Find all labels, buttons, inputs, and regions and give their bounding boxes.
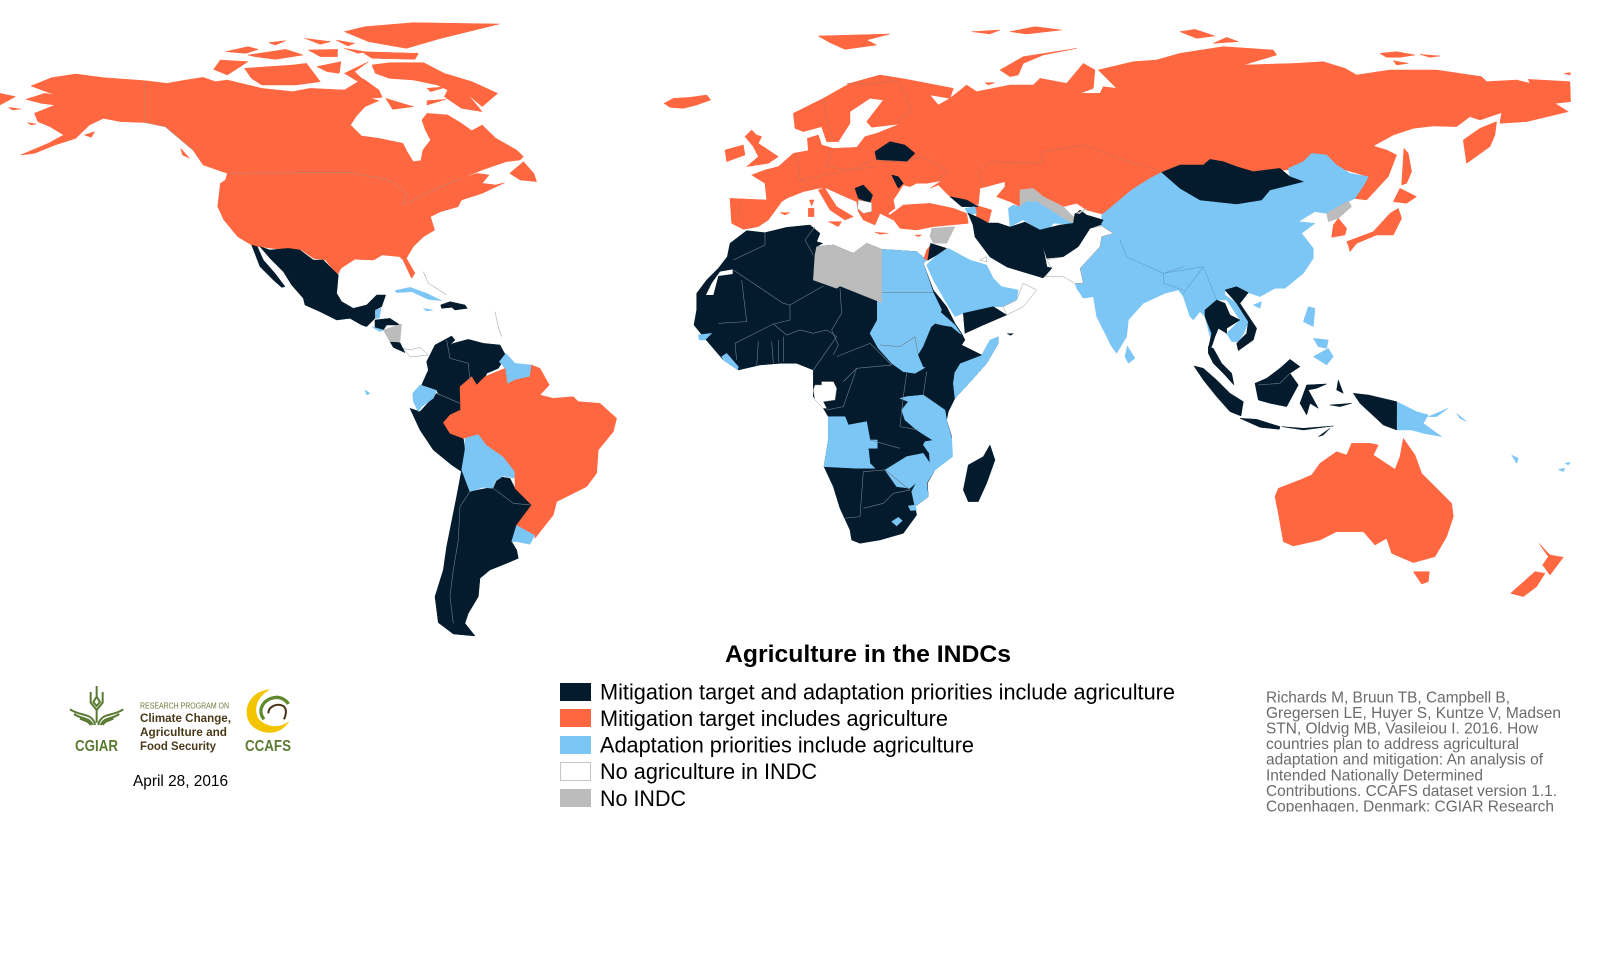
citation text block: adaptation and mitigation: An analysis of	[1266, 752, 1544, 769]
logo text: research program: Food Security	[140, 741, 217, 753]
legend item: adaptation: Adaptation priorities include agriculture	[600, 732, 974, 758]
region: Iran	[968, 213, 1052, 278]
citation text block: Contributions. CCAFS dataset version 1.1.	[1266, 783, 1557, 800]
region: North America	[0, 23, 537, 278]
citation text block: STN, Oldvig MB, Vasileiou I. 2016. How	[1266, 720, 1538, 738]
logo text: research program: Climate Change,	[140, 713, 231, 725]
region: Australia and New Zealand	[1275, 438, 1571, 597]
date: April 28, 2016	[133, 773, 228, 790]
icon: CCAFS crescent	[247, 689, 289, 733]
region: Africa and Arabia	[694, 225, 1037, 543]
logo text: research program: RESEARCH PROGRAM ON	[140, 702, 229, 710]
world map	[0, 23, 1571, 636]
legend	[560, 680, 1175, 811]
logo: CGIAR	[70, 686, 123, 755]
logo text: research program: Agriculture and	[140, 727, 227, 739]
citation text block: Intended Nationally Determined	[1266, 767, 1483, 784]
legend item: no INDC: No INDC	[600, 786, 686, 811]
citation text block	[1266, 689, 1561, 816]
logo text: research program	[140, 702, 231, 753]
icon: wheat and leaves	[70, 686, 123, 725]
legend item: no agriculture: No agriculture in INDC	[600, 759, 817, 784]
legend item: mitigation and adaptation: Mitigation target and adaptation priorities include agriculture	[600, 680, 1175, 704]
legend item: no INDC	[560, 786, 686, 811]
region: Latin America	[252, 245, 617, 636]
citation text block: Richards M, Bruun TB, Campbell B,	[1266, 689, 1510, 706]
citation text block: countries plan to address agricultural	[1266, 736, 1519, 753]
legend item: mitigation: Mitigation target includes agriculture	[600, 706, 948, 731]
logo: CCAFS: CCAFS	[245, 738, 291, 755]
region: South and East Asia	[1040, 153, 1467, 437]
title: Agriculture in the INDCs	[725, 641, 1011, 668]
logo: CGIAR: CGIAR	[75, 738, 118, 755]
region: Europe and Russia	[664, 27, 1571, 237]
citation text block: Copenhagen, Denmark: CGIAR Research	[1266, 798, 1554, 816]
logo: CCAFS	[245, 689, 291, 755]
